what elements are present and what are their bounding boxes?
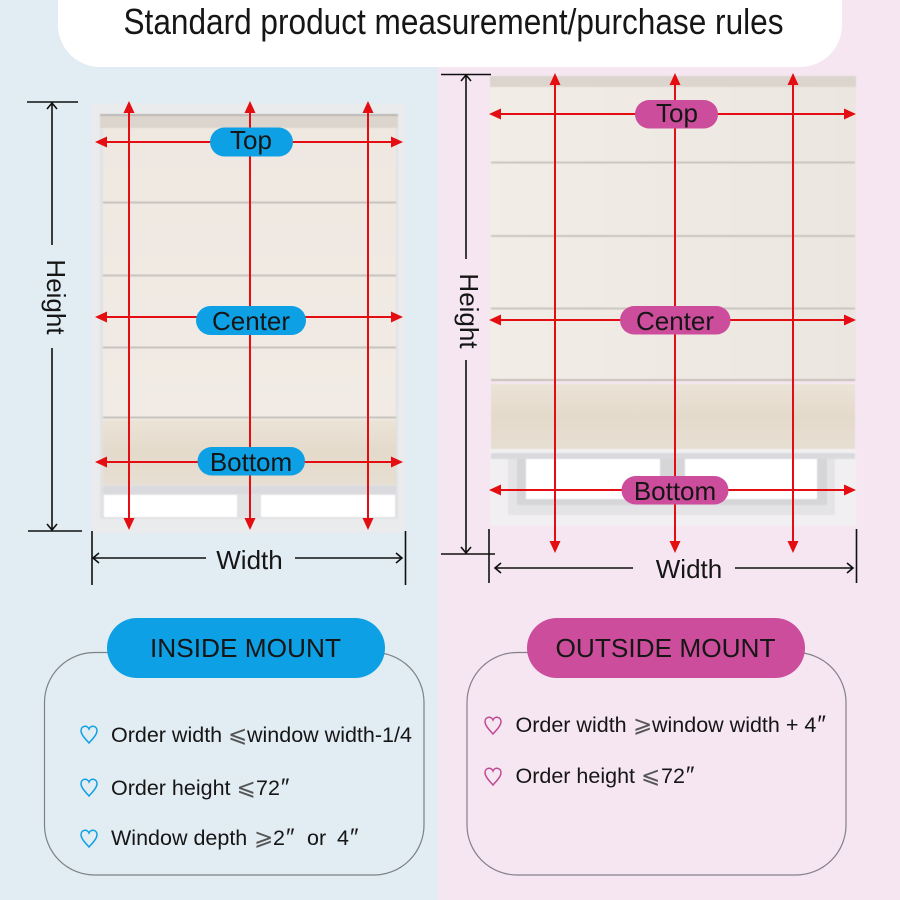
rule: order width: ⩽ [228, 722, 247, 748]
heading: outside mount [527, 618, 805, 678]
rule: order height: 72 [256, 776, 280, 800]
background: right panel [438, 0, 900, 900]
rule: window depth: ″ [286, 824, 295, 851]
height dimension: inside mount [27, 102, 82, 531]
inside mount diagram [27, 101, 406, 585]
rule: order width: window width + 4 [651, 713, 816, 737]
title: Standard product measurement/purchase rules [124, 1, 784, 42]
rule: window depth: 4 [337, 826, 349, 850]
heading: inside mount [107, 618, 385, 678]
rule: window depth: Window depth [111, 826, 247, 850]
rule: order width: ″ [817, 711, 826, 738]
red measurement arrows: outside mount [489, 73, 856, 553]
rule: window depth: ″ [350, 824, 359, 851]
panel: outside mount rules [467, 618, 846, 875]
outside mount diagram [441, 73, 856, 584]
label: Bottom: Bottom [210, 447, 292, 477]
rule: order width: Order width [111, 723, 222, 747]
title [58, 0, 842, 67]
rule: window depth [81, 824, 359, 851]
rule: order height: 72 [661, 764, 685, 788]
width dimension: outside mount [489, 529, 856, 584]
rule: order height: ⩽ [641, 763, 660, 789]
width dimension: outside mount: Width [656, 554, 722, 584]
rule: order height: ⩽ [236, 775, 256, 801]
rule: order width [81, 722, 412, 748]
height dimension: outside mount: Height [454, 273, 484, 349]
label: Top: Top [656, 98, 698, 128]
rule: order width: Order width [516, 713, 627, 737]
width dimension: inside mount: Width [216, 545, 283, 575]
height dimension: outside mount [441, 74, 495, 554]
window blind: inside mount [92, 104, 405, 533]
rule: order height: Order height [516, 764, 635, 788]
rule: order height [485, 762, 695, 789]
label: Center: Center [212, 306, 290, 336]
red measurement arrows: inside mount [95, 101, 403, 530]
label: Top: Top [230, 125, 272, 155]
rule: order width: window width-1/4 [246, 723, 412, 747]
rule: order height: ″ [686, 762, 695, 789]
rule: window depth: or [307, 826, 326, 850]
label: Top [210, 125, 293, 156]
height dimension: inside mount: Height [41, 259, 71, 335]
rule: order width: ⩾ [633, 712, 652, 738]
rule: window depth: ⩾ [254, 825, 273, 851]
width dimension: inside mount [92, 531, 406, 585]
rule: window depth: 2 [273, 826, 285, 850]
heading: outside mount: OUTSIDE MOUNT [556, 633, 776, 663]
background: left panel [0, 0, 438, 900]
label: Bottom: Bottom [634, 476, 716, 506]
rule: order height: ″ [281, 774, 290, 801]
rule: order height [81, 774, 290, 801]
heading: inside mount: INSIDE MOUNT [150, 633, 341, 663]
panel: inside mount rules [44, 618, 424, 875]
label: Top [635, 98, 718, 128]
window blind: outside mount [490, 76, 856, 526]
label: Center: Center [636, 306, 714, 336]
rule: order width [485, 711, 826, 738]
rule: order height: Order height [111, 776, 231, 800]
